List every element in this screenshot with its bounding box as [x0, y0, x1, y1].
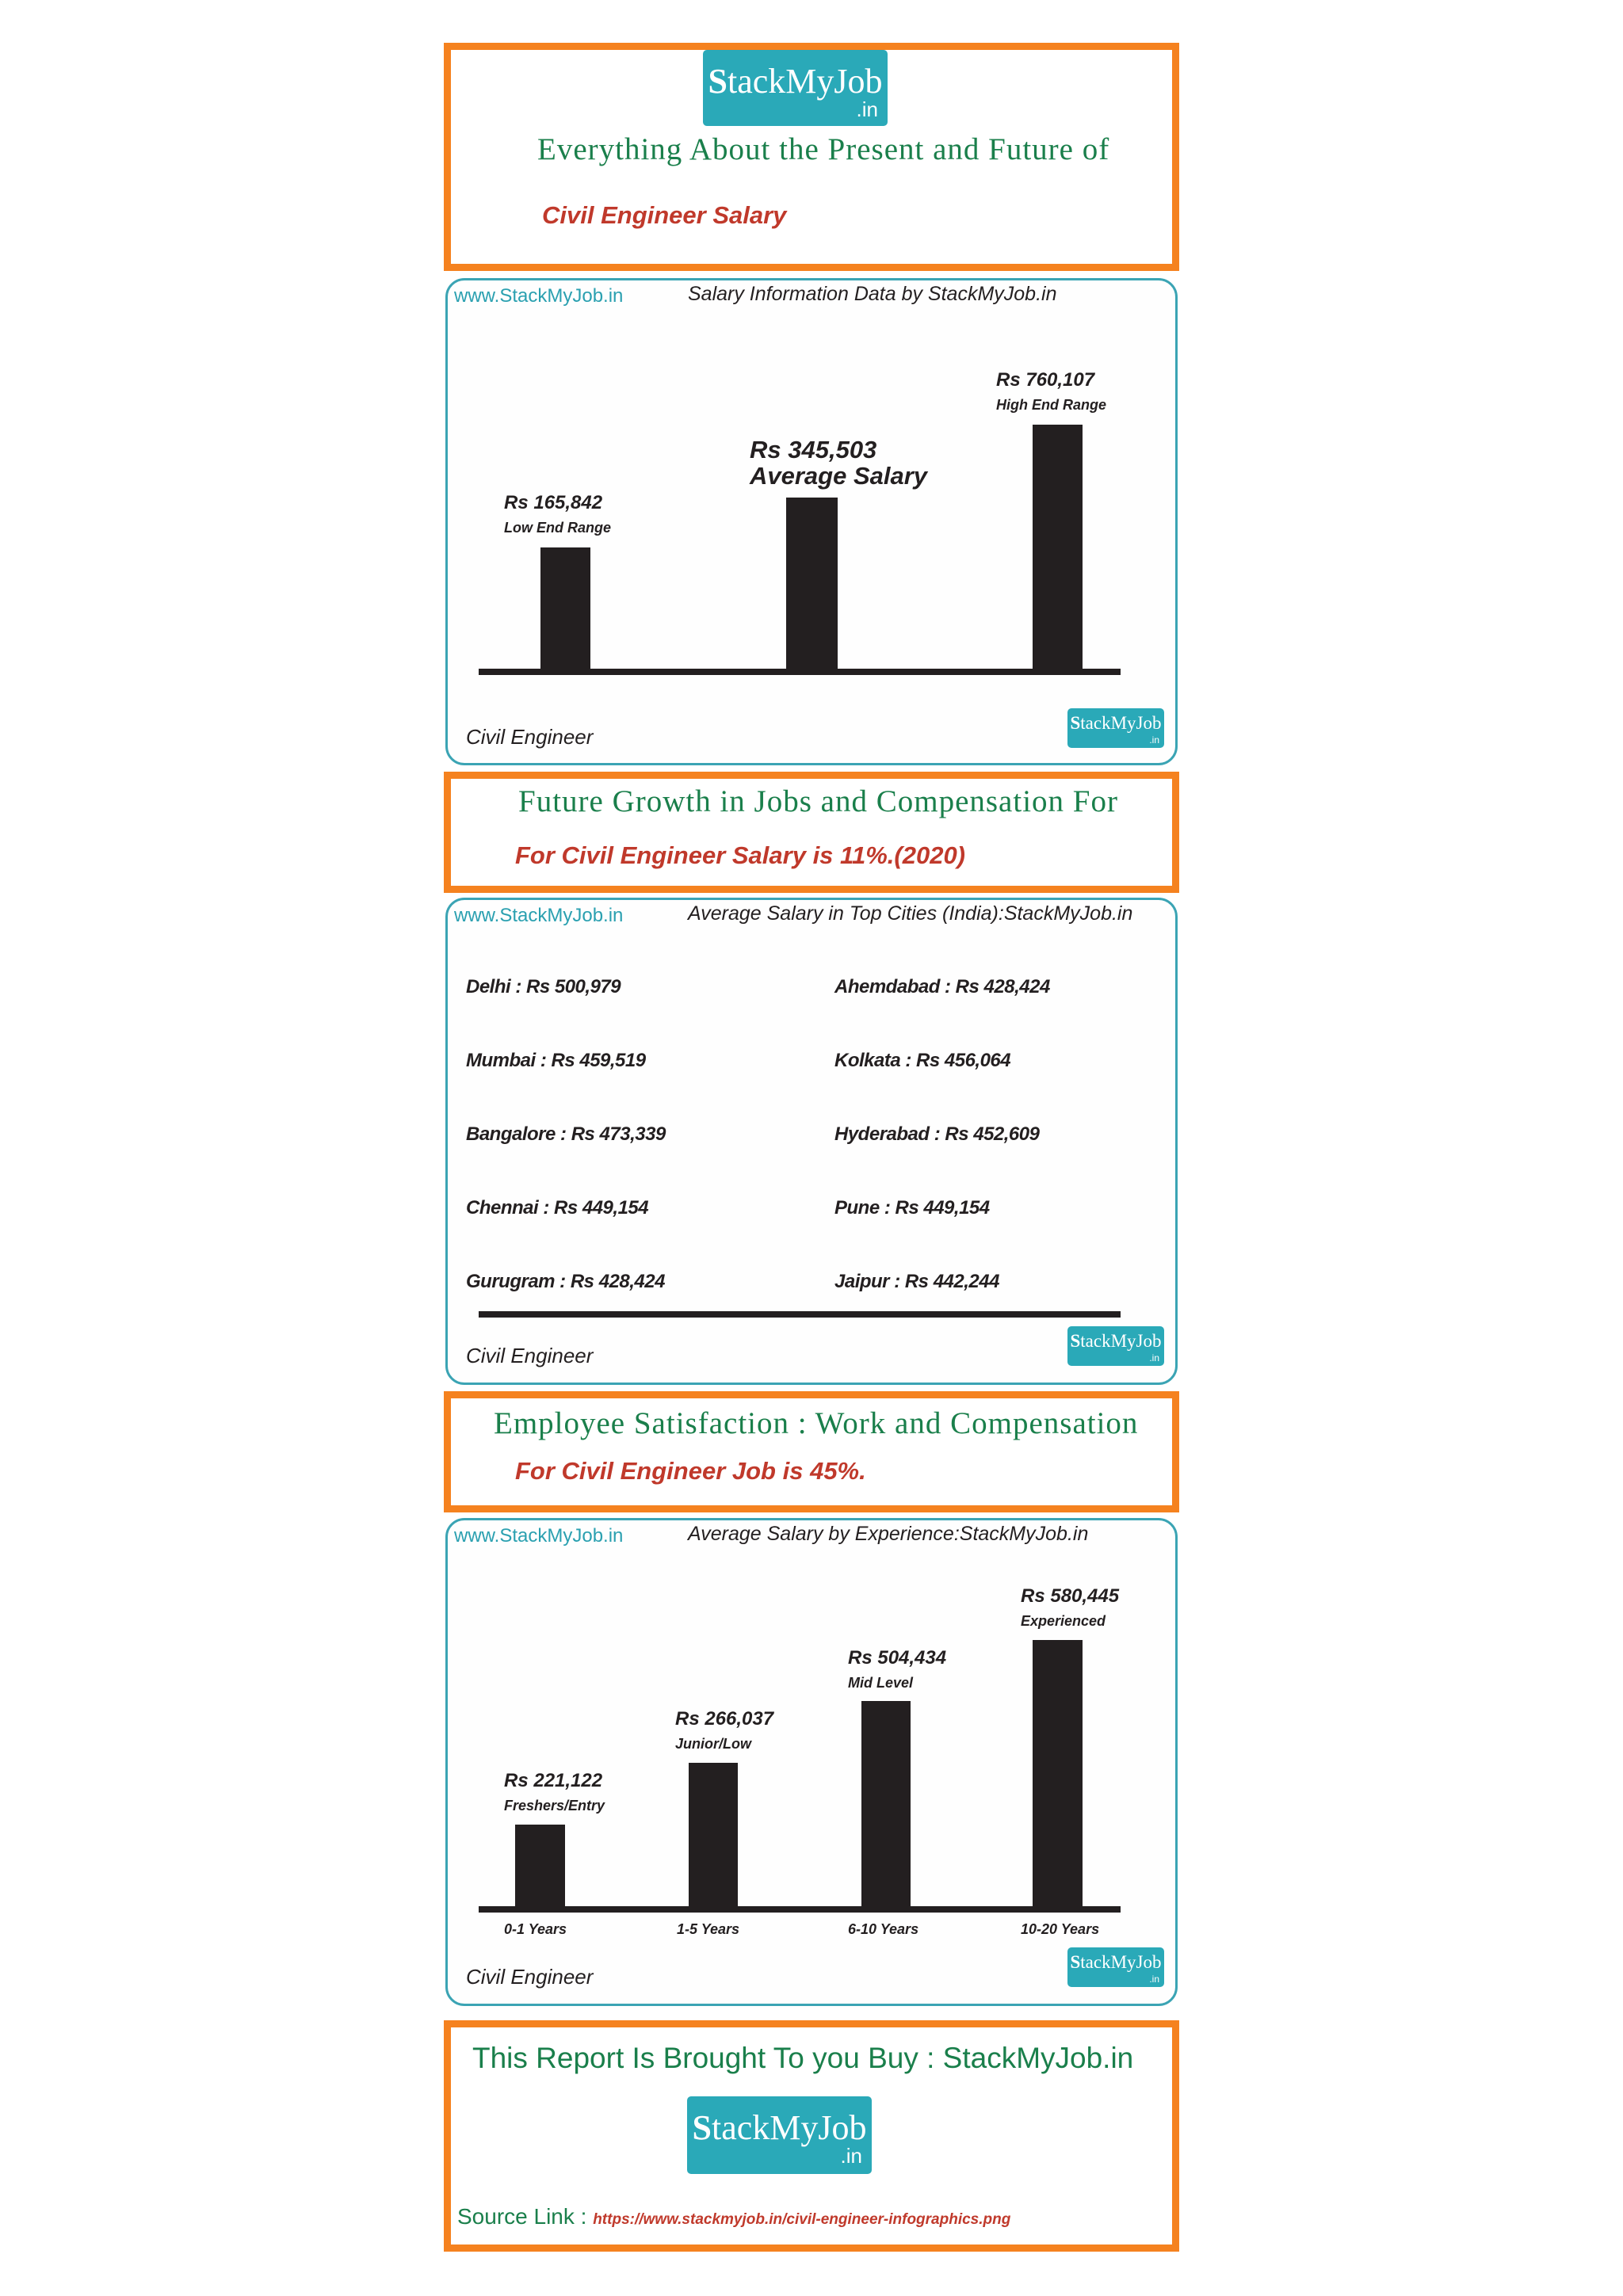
logo: small 1: [1067, 708, 1164, 748]
label: freshers: Freshers/Entry: [504, 1798, 605, 1814]
logo: top: StackMyJob: [708, 62, 883, 101]
bar: high: [1033, 425, 1083, 670]
site url 3: www.StackMyJob.in: [454, 1525, 623, 1547]
growth box: [444, 772, 1179, 893]
header box: [444, 43, 1179, 271]
logo: small 1: StackMyJob: [1070, 713, 1162, 733]
label: average: [749, 436, 929, 490]
label: high: Rs 760,107: [996, 369, 1094, 391]
label: low: [504, 492, 611, 536]
footer box: [444, 2020, 1179, 2252]
label: experienced: Experienced: [1021, 1613, 1106, 1629]
label: freshers: Rs 221,122: [504, 1770, 602, 1791]
site url 2: www.StackMyJob.in: [454, 905, 623, 926]
city list: Kolkata : Rs 456,064: [834, 1050, 1010, 1071]
label: high: [996, 369, 1106, 413]
bar: average: [786, 498, 838, 670]
label: junior: Rs 266,037: [675, 1708, 773, 1730]
label: experienced: [1021, 1585, 1119, 1629]
label: high: High End Range: [996, 397, 1106, 413]
panel: salary range chart: [445, 278, 1178, 765]
footer label 2: Civil Engineer: [466, 1344, 593, 1367]
bar: 1-5: [689, 1763, 738, 1909]
label: freshers: [504, 1770, 605, 1814]
label: junior: [675, 1708, 774, 1752]
growth stat: For Civil Engineer Salary is 11%.(2020): [515, 841, 965, 869]
label: mid: Rs 504,434: [848, 1647, 946, 1669]
logo: small 3: StackMyJob: [1070, 1952, 1162, 1972]
city list: Jaipur : Rs 442,244: [834, 1271, 999, 1292]
axis: [479, 669, 1121, 675]
growth heading: Future Growth in Jobs and Compensation For: [518, 784, 1118, 818]
x-axis labels: 1-5 Years: [677, 1921, 739, 1937]
bar: 0-1: [515, 1825, 565, 1909]
footer label 3: Civil Engineer: [466, 1965, 593, 1989]
logo: small 3: .in: [1149, 1974, 1159, 1985]
panel: cities: [445, 898, 1178, 1385]
label: average: Rs 345,503: [750, 436, 876, 463]
chart title 1: Salary Information Data by StackMyJob.in: [688, 283, 1056, 305]
satisfaction stat: For Civil Engineer Job is 45%.: [515, 1457, 866, 1485]
logo: footer: .in: [841, 2144, 862, 2168]
chart title 2: Average Salary in Top Cities (India):StackMyJob.in: [688, 902, 1132, 925]
label: average: Average Salary: [750, 462, 927, 490]
city list: Gurugram : Rs 428,424: [466, 1271, 665, 1292]
logo: small 2: StackMyJob: [1070, 1331, 1162, 1351]
bar: 10-20: [1033, 1640, 1083, 1909]
logo: small 1: .in: [1149, 734, 1159, 746]
satisfaction box: [444, 1391, 1179, 1512]
label: junior: Junior/Low: [675, 1736, 751, 1752]
bar: low: [540, 547, 590, 670]
site url 1: www.StackMyJob.in: [454, 285, 623, 307]
logo: small 2: [1067, 1326, 1164, 1366]
label: low: Rs 165,842: [504, 492, 602, 513]
satisfaction heading: Employee Satisfaction : Work and Compensation: [494, 1406, 1138, 1440]
axis: [479, 1906, 1121, 1913]
city list: Bangalore : Rs 473,339: [466, 1123, 666, 1145]
logo: footer: StackMyJob: [692, 2108, 867, 2147]
footer label 1: Civil Engineer: [466, 725, 593, 749]
logo: top: [703, 50, 888, 126]
label: experienced: Rs 580,445: [1021, 1585, 1119, 1607]
city list: [466, 976, 1050, 1292]
city list: Delhi : Rs 500,979: [466, 976, 621, 997]
label: mid: [848, 1647, 946, 1691]
x-axis labels: 0-1 Years: [504, 1921, 567, 1937]
bar chart: salary range: [479, 425, 1121, 675]
city list: Chennai : Rs 449,154: [466, 1197, 648, 1219]
x-axis labels: [504, 1921, 1099, 1937]
city list: Pune : Rs 449,154: [834, 1197, 990, 1219]
label: low: Low End Range: [504, 520, 611, 536]
x-axis labels: 10-20 Years: [1021, 1921, 1099, 1937]
bar: 6-10: [861, 1701, 911, 1909]
logo: top: .in: [857, 97, 878, 121]
logo: small 3: [1067, 1947, 1164, 1987]
city list: Ahemdabad : Rs 428,424: [834, 976, 1050, 997]
footer heading: This Report Is Brought To you Buy : StackMyJob.in: [472, 2042, 1133, 2074]
panel: experience: [445, 1518, 1178, 2006]
city list: Hyderabad : Rs 452,609: [834, 1123, 1039, 1145]
subtitle: Civil Engineer Salary: [542, 201, 786, 229]
logo: footer: [687, 2096, 872, 2174]
x-axis labels: 6-10 Years: [848, 1921, 918, 1937]
label: mid: Mid Level: [848, 1675, 913, 1691]
logo: small 2: .in: [1149, 1352, 1159, 1363]
city list: Mumbai : Rs 459,519: [466, 1050, 646, 1071]
chart title 3: Average Salary by Experience:StackMyJob.in: [688, 1523, 1088, 1545]
bar chart: experience: [479, 1640, 1121, 1913]
title: Everything About the Present and Future of: [537, 132, 1109, 166]
source link: Source Link : https://www.stackmyjob.in/civil-engineer-infographics.png: [457, 2204, 1010, 2229]
